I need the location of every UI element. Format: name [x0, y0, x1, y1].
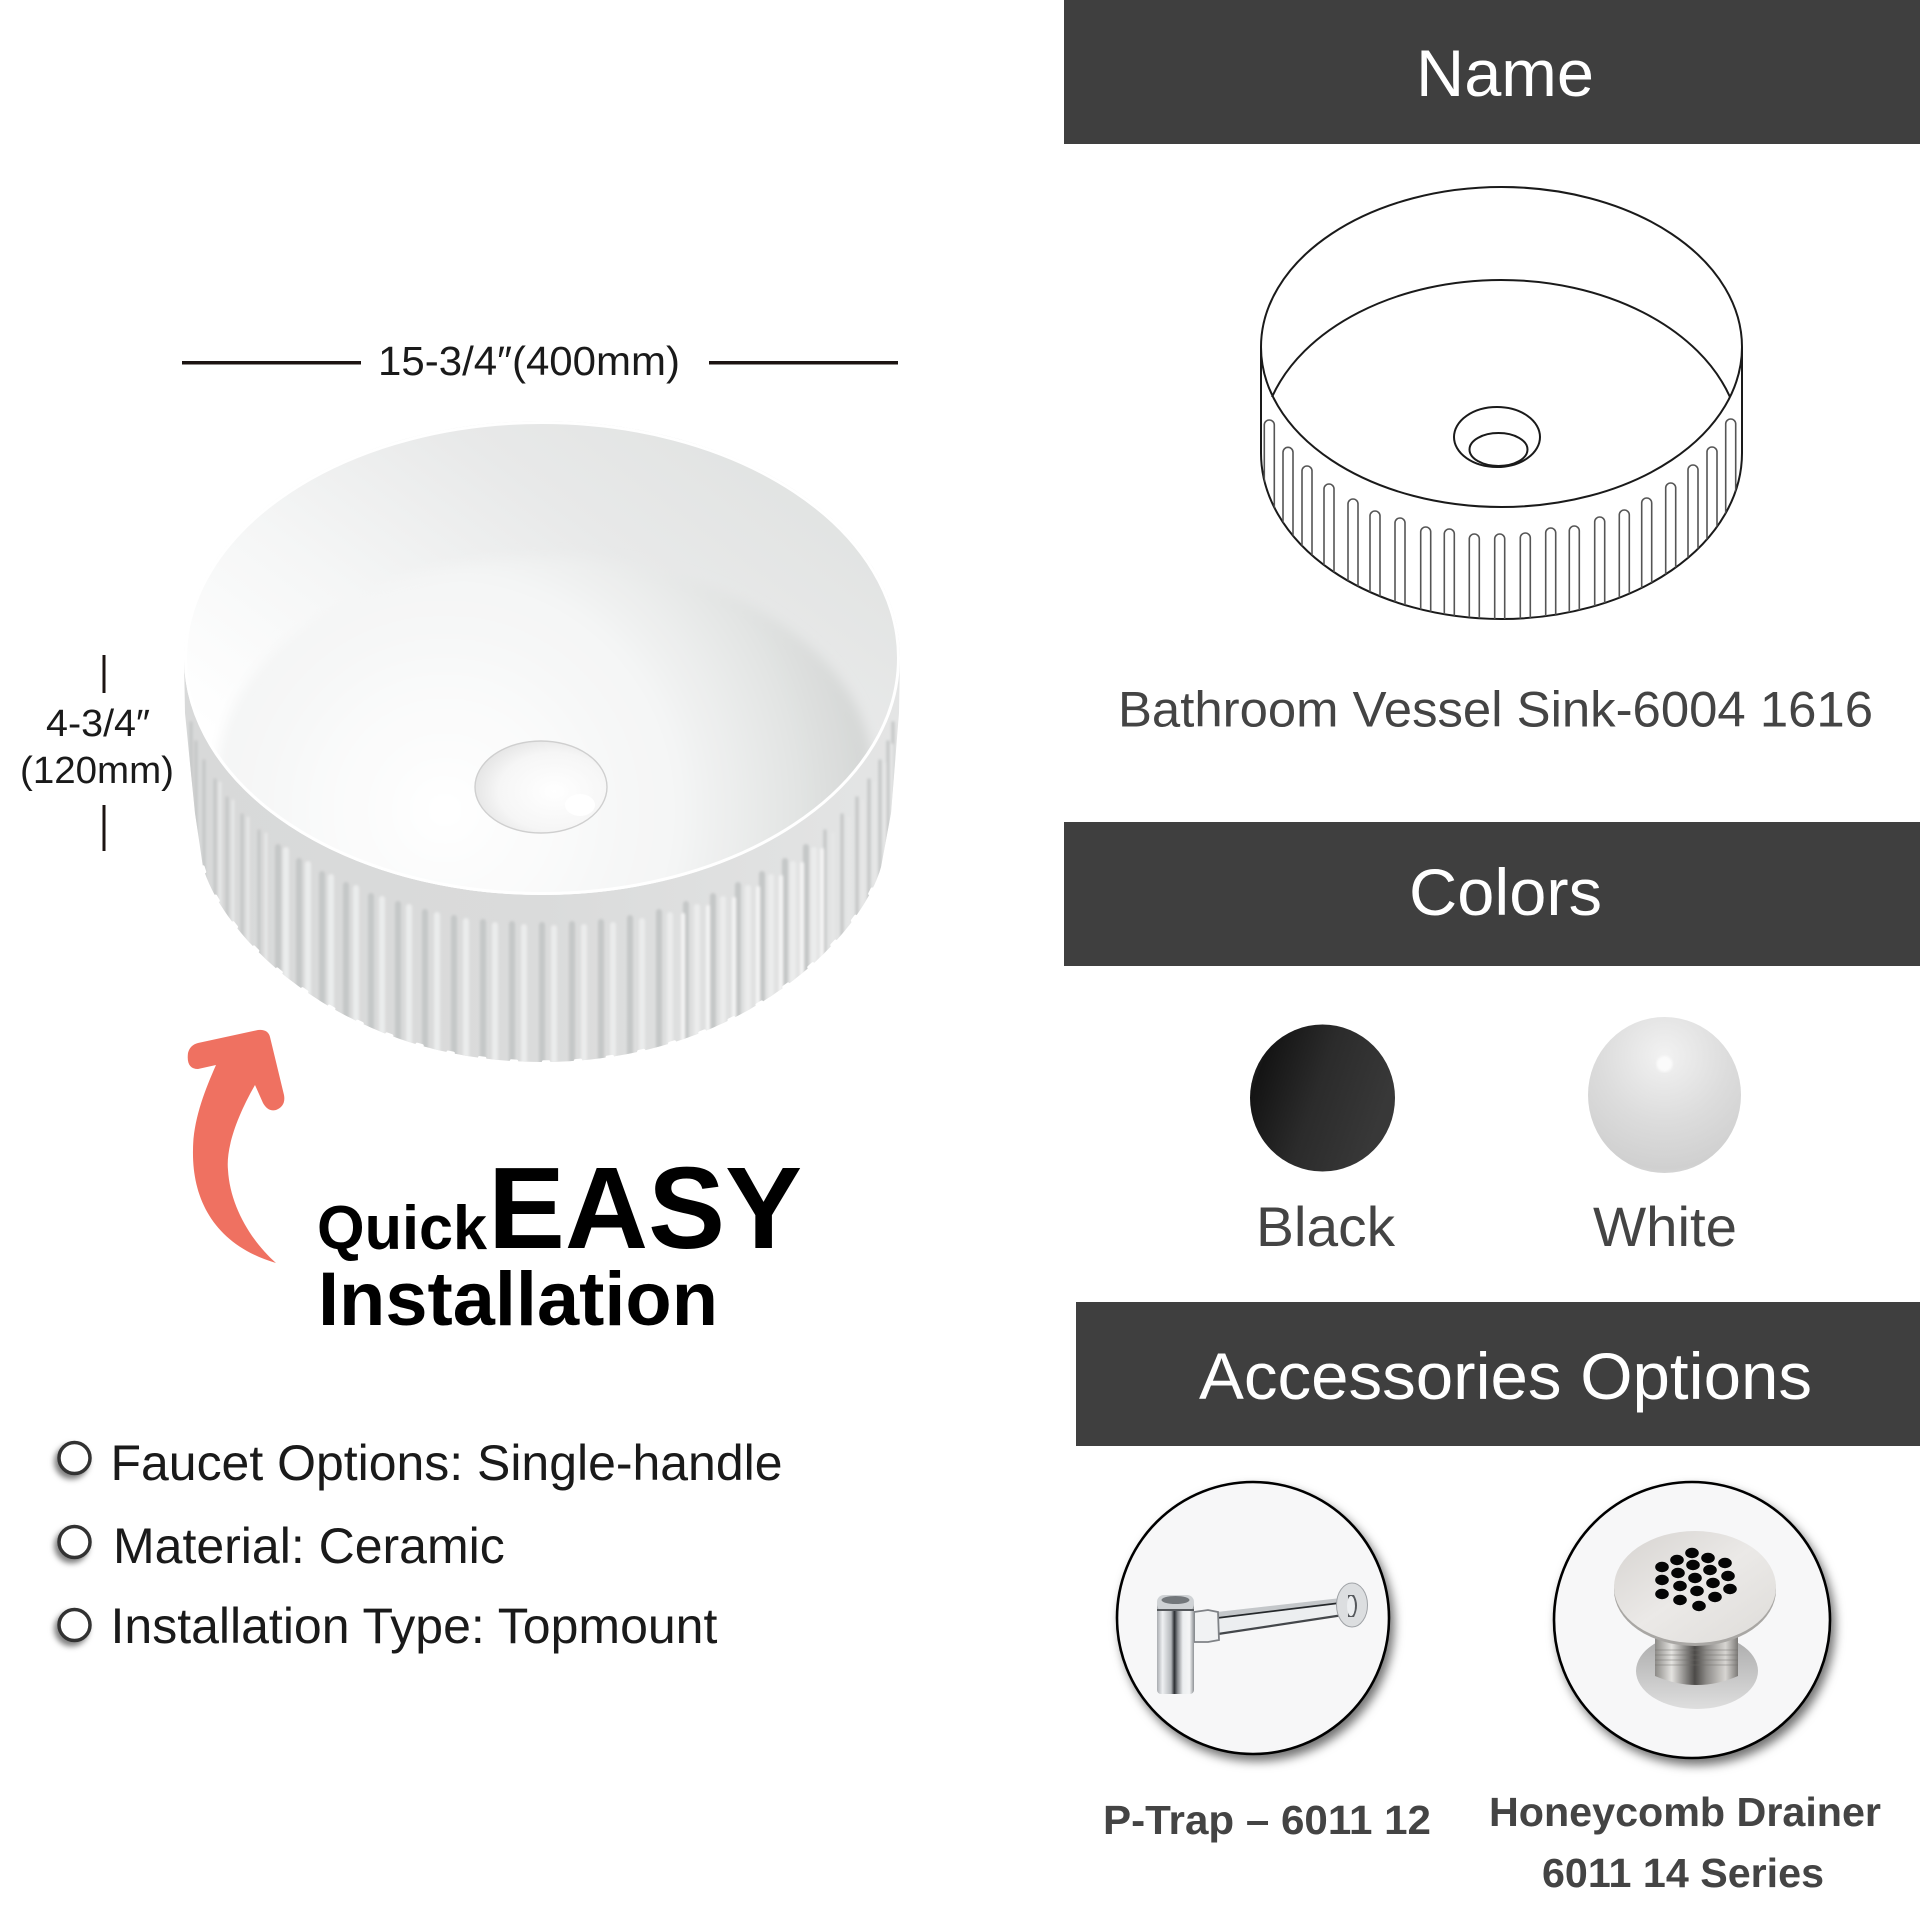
header: accessories options: Accessories Options	[1199, 1339, 1812, 1413]
icon: p-trap pipe	[1157, 1583, 1368, 1694]
text: faucet options: Faucet Options: Single-handle	[110, 1435, 782, 1491]
sink basin	[184, 424, 900, 895]
width dimension	[182, 338, 898, 384]
bullet: faucet	[59, 1442, 90, 1474]
heading: quick easy installation: Quick	[317, 1194, 488, 1263]
header: name: Name	[1416, 36, 1594, 110]
text: installation type: Installation Type: Topmount	[110, 1598, 717, 1654]
swatch: black	[1250, 1024, 1396, 1258]
header: accessories options	[1076, 1302, 1920, 1446]
height dimension	[20, 655, 174, 851]
heading: quick easy installation: Installation	[318, 1257, 718, 1342]
icon: drainer	[1614, 1531, 1776, 1709]
header: name	[1064, 0, 1920, 144]
sink fluted body	[184, 658, 900, 1066]
line drawing of sink	[1261, 187, 1742, 622]
arrow	[188, 1030, 284, 1263]
heading: quick easy installation	[317, 1143, 802, 1342]
feature list	[59, 1435, 782, 1654]
sink drain plug	[475, 741, 607, 833]
accessory: honeycomb drainer	[1489, 1482, 1881, 1896]
product name: Bathroom Vessel Sink-6004 1616	[1118, 680, 1873, 738]
height dimension: 4-3/4″	[46, 703, 150, 745]
header: colors: Colors	[1409, 855, 1602, 929]
text: p-trap label: P-Trap – 6011 12	[1103, 1797, 1431, 1843]
accessory: p-trap	[1103, 1482, 1431, 1843]
bullet: installation type	[59, 1610, 90, 1640]
text: drainer series: 6011 14 Series	[1542, 1850, 1824, 1896]
sink photo	[184, 421, 900, 1066]
header: colors	[1064, 822, 1920, 966]
text: material: Material: Ceramic	[113, 1518, 505, 1574]
swatch: black: Black	[1256, 1195, 1396, 1258]
width dimension: 15-3/4″(400mm)	[378, 338, 680, 384]
text: drainer label: Honeycomb Drainer	[1489, 1789, 1881, 1835]
swatch: white: White	[1593, 1195, 1737, 1258]
height dimension: (120mm)	[20, 750, 174, 792]
bullet: material	[59, 1526, 90, 1558]
swatch: white	[1588, 1017, 1741, 1258]
heading: quick easy installation: EASY	[488, 1143, 802, 1273]
